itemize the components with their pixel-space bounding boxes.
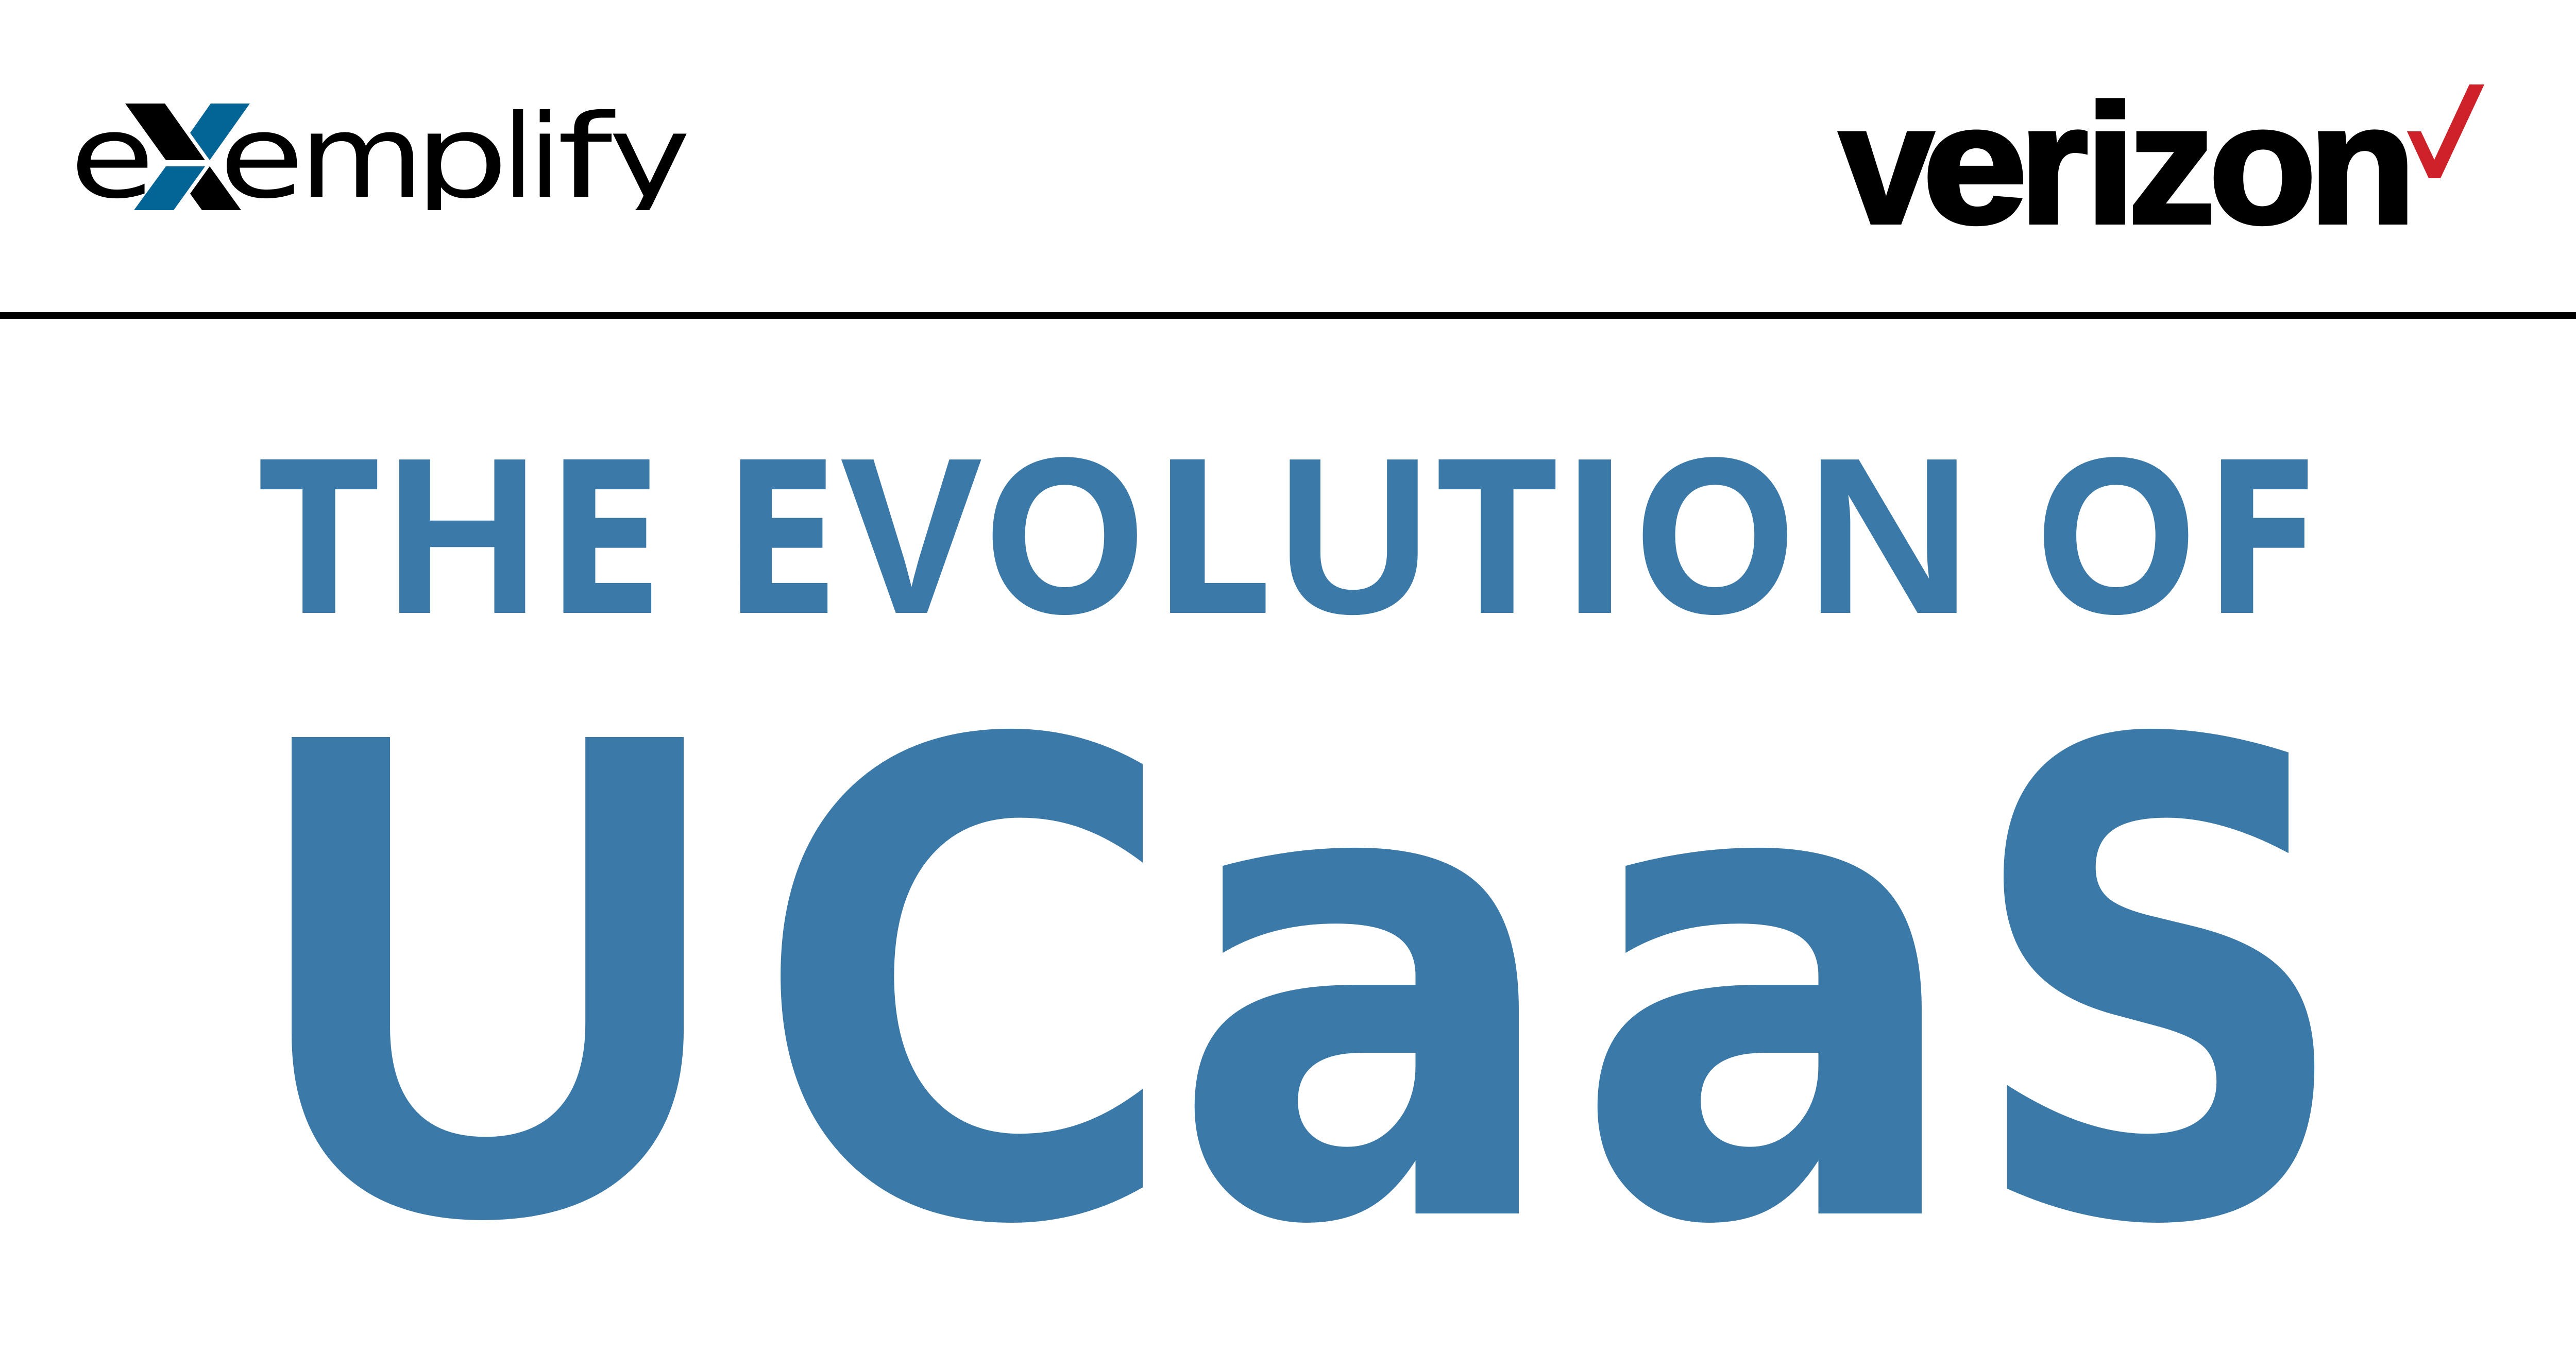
heading: UCaaS <box>256 592 2354 1352</box>
heading: THE EVOLUTION OF <box>260 411 2322 663</box>
exemplify wordmark: m <box>299 90 424 224</box>
heading: THE EVOLUTION OF: E <box>548 417 664 663</box>
heading: UCaaS: C <box>752 607 1180 1352</box>
verizon wordmark: i <box>2085 70 2136 259</box>
exemplify wordmark <box>77 109 687 210</box>
heading: THE EVOLUTION OF: T <box>260 418 379 663</box>
heading: UCaaS: U <box>256 592 720 1352</box>
verizon wordmark <box>1839 70 2416 259</box>
verizon wordmark: v <box>1839 70 1935 259</box>
heading: THE EVOLUTION OF: U <box>1277 411 1431 660</box>
logo: verizon <box>1839 70 2484 259</box>
icon: exemplify X mark <box>125 104 250 210</box>
exemplify wordmark: p <box>414 90 509 224</box>
heading: THE EVOLUTION OF: T <box>1438 418 1557 663</box>
heading: UCaaS: a <box>1170 608 1565 1352</box>
heading: THE EVOLUTION OF: O <box>2037 413 2195 658</box>
heading: UCaaS: S <box>1965 608 2354 1352</box>
heading: THE EVOLUTION OF: O <box>986 413 1144 658</box>
heading: THE EVOLUTION OF: V <box>840 411 984 660</box>
verizon wordmark: e <box>1923 70 2027 259</box>
exemplify wordmark: f <box>557 90 616 225</box>
heading: THE EVOLUTION OF: L <box>1153 417 1270 663</box>
verizon wordmark: z <box>2128 70 2215 259</box>
heading: THE EVOLUTION OF: I <box>1564 412 1626 661</box>
heading: THE EVOLUTION OF: E <box>725 418 840 663</box>
logo: exemplify <box>77 104 687 210</box>
verizon wordmark: r <box>2019 70 2088 259</box>
heading: UCaaS: a <box>1572 608 1968 1352</box>
heading: THE EVOLUTION OF: N <box>1805 412 1972 660</box>
verizon wordmark: o <box>2209 70 2316 259</box>
exemplify wordmark: y <box>609 90 691 224</box>
heading: THE EVOLUTION OF: F <box>2206 418 2322 663</box>
heading: THE EVOLUTION OF: O <box>1636 413 1794 658</box>
icon: red check mark <box>2407 84 2484 178</box>
verizon wordmark: n <box>2309 70 2416 259</box>
header divider <box>0 312 2576 319</box>
exemplify wordmark: e <box>219 90 304 224</box>
heading: THE EVOLUTION OF: H <box>385 411 539 660</box>
exemplify wordmark: l <box>503 90 533 224</box>
exemplify wordmark: i <box>529 90 561 224</box>
exemplify wordmark: e <box>70 90 155 224</box>
